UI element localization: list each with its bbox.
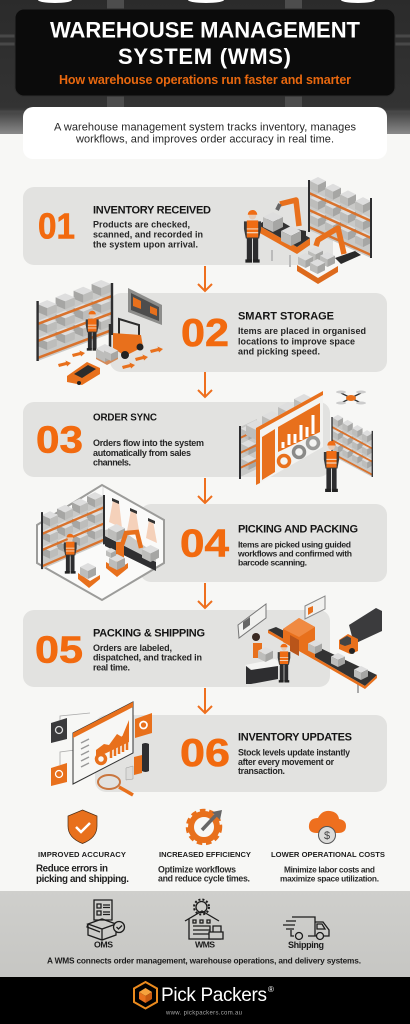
number 02: 02	[181, 312, 229, 355]
arrow 3	[198, 478, 212, 503]
body text	[237, 539, 352, 568]
number 03: 03	[36, 419, 83, 461]
connected systems band	[0, 891, 410, 977]
icon: OMS	[87, 900, 124, 940]
logo icon: hexagon cube	[134, 982, 157, 1008]
body text: Orders flow into the system	[93, 438, 204, 448]
body text: channels.	[93, 457, 131, 467]
label: shipping: Shipping	[288, 940, 324, 950]
body text: after every movement or	[238, 757, 335, 767]
panel: step 2 smart storage	[38, 280, 387, 385]
illustration: dashboard board	[240, 390, 372, 492]
intro text box: A warehouse management system tracks inventory, manages	[54, 122, 356, 134]
panel: step 3 order sync	[23, 390, 372, 492]
heading: PICKING AND PACKING	[238, 524, 358, 536]
benefit: lower operational costs	[271, 811, 385, 883]
body text: scanned, and recorded in	[93, 229, 203, 239]
label: WMS: WMS	[195, 939, 215, 949]
benefit: increased efficiency	[158, 810, 251, 884]
title: SYSTEM (WMS)	[118, 44, 291, 69]
header warehouse photo background	[0, 0, 410, 134]
heading: PACKING & SHIPPING	[93, 627, 205, 639]
benefit: increased efficiency: Optimize workflows	[158, 864, 236, 874]
benefit: improved accuracy: picking and shipping.	[36, 874, 129, 885]
number 06: 06	[180, 732, 230, 775]
benefit: lower operational costs: LOWER OPERATIONAL COSTS	[271, 850, 385, 859]
body text: dispatched, and tracked in	[93, 653, 202, 663]
body text: Orders are labeled,	[93, 643, 172, 653]
arrow 4	[198, 583, 212, 608]
intro text box: workflows, and improves order accuracy in real time.	[75, 134, 334, 146]
website: www. pickpackers.com.au	[165, 1010, 242, 1016]
panel: step 1 inventory received	[23, 177, 371, 284]
caption: A WMS connects order management, warehouse operations, and delivery systems.	[47, 955, 361, 965]
heading: INVENTORY RECEIVED	[93, 204, 211, 216]
body text: workflows and confirmed with	[237, 549, 352, 559]
benefit: lower operational costs: Minimize labor costs and	[284, 864, 375, 874]
footer band	[0, 977, 410, 1024]
benefit: improved accuracy	[36, 810, 129, 885]
benefit: increased efficiency: and reduce cycle times.	[158, 874, 250, 884]
body text: Stock levels update instantly	[238, 748, 350, 758]
illustration: receiving station	[244, 177, 371, 284]
illustration: forklift and racks	[38, 280, 163, 385]
heading: SMART STORAGE	[238, 310, 334, 322]
heading: ORDER SYNC	[93, 413, 157, 424]
body text: automatically from sales	[93, 448, 191, 458]
body text: real time.	[93, 662, 130, 672]
panel: step 6 inventory updates	[51, 702, 387, 795]
body text	[238, 326, 366, 356]
body text: the system upon arrival.	[93, 239, 198, 249]
body text	[238, 748, 350, 776]
body text: barcode scanning.	[238, 558, 307, 568]
body text	[93, 643, 202, 672]
registered mark: ®	[268, 985, 274, 994]
label: OMS: OMS	[94, 939, 113, 949]
benefit: increased efficiency: INCREASED EFFICIENCY	[159, 850, 251, 859]
heading: INVENTORY UPDATES	[238, 731, 352, 743]
body text: Products are checked,	[93, 219, 190, 229]
arrow 5	[198, 688, 212, 713]
intro text box	[23, 107, 387, 159]
subtitle: How warehouse operations run faster and smarter	[59, 73, 351, 87]
body text: Items are placed in organised	[238, 326, 366, 336]
number 04: 04	[180, 523, 229, 566]
illustration: conveyor and truck	[238, 596, 382, 693]
icon: WMS	[185, 900, 223, 939]
body text: and picking speed.	[238, 346, 320, 356]
benefit: lower operational costs: maximize space utilization.	[280, 873, 379, 883]
illustration: analytics dashboard	[51, 702, 152, 795]
number 01: 01	[38, 206, 75, 247]
title panel	[15, 9, 395, 96]
body text	[93, 438, 204, 467]
icon: shipping truck	[283, 917, 329, 940]
title: WAREHOUSE MANAGEMENT	[50, 18, 361, 42]
panel: step 4 picking and packing	[37, 485, 387, 600]
benefit: improved accuracy: Reduce errors in	[36, 864, 108, 875]
arrow 1	[198, 266, 212, 291]
illustration: warehouse room cutaway	[37, 485, 164, 600]
icon: gear and arrow	[188, 810, 222, 844]
benefit: improved accuracy: IMPROVED ACCURACY	[38, 850, 126, 859]
body text: locations to improve space	[238, 336, 355, 346]
logo wordmark: Pick Packers	[161, 985, 267, 1006]
body text: transaction.	[238, 766, 285, 776]
arrow 2	[198, 372, 212, 397]
icon: cloud and coin: $	[324, 830, 330, 842]
title	[50, 18, 361, 69]
body text	[93, 219, 203, 249]
number 05: 05	[35, 629, 83, 671]
icon: shield	[68, 810, 97, 844]
body text: Items are picked using guided	[238, 539, 351, 549]
panel: step 5 packing and shipping	[23, 596, 382, 693]
